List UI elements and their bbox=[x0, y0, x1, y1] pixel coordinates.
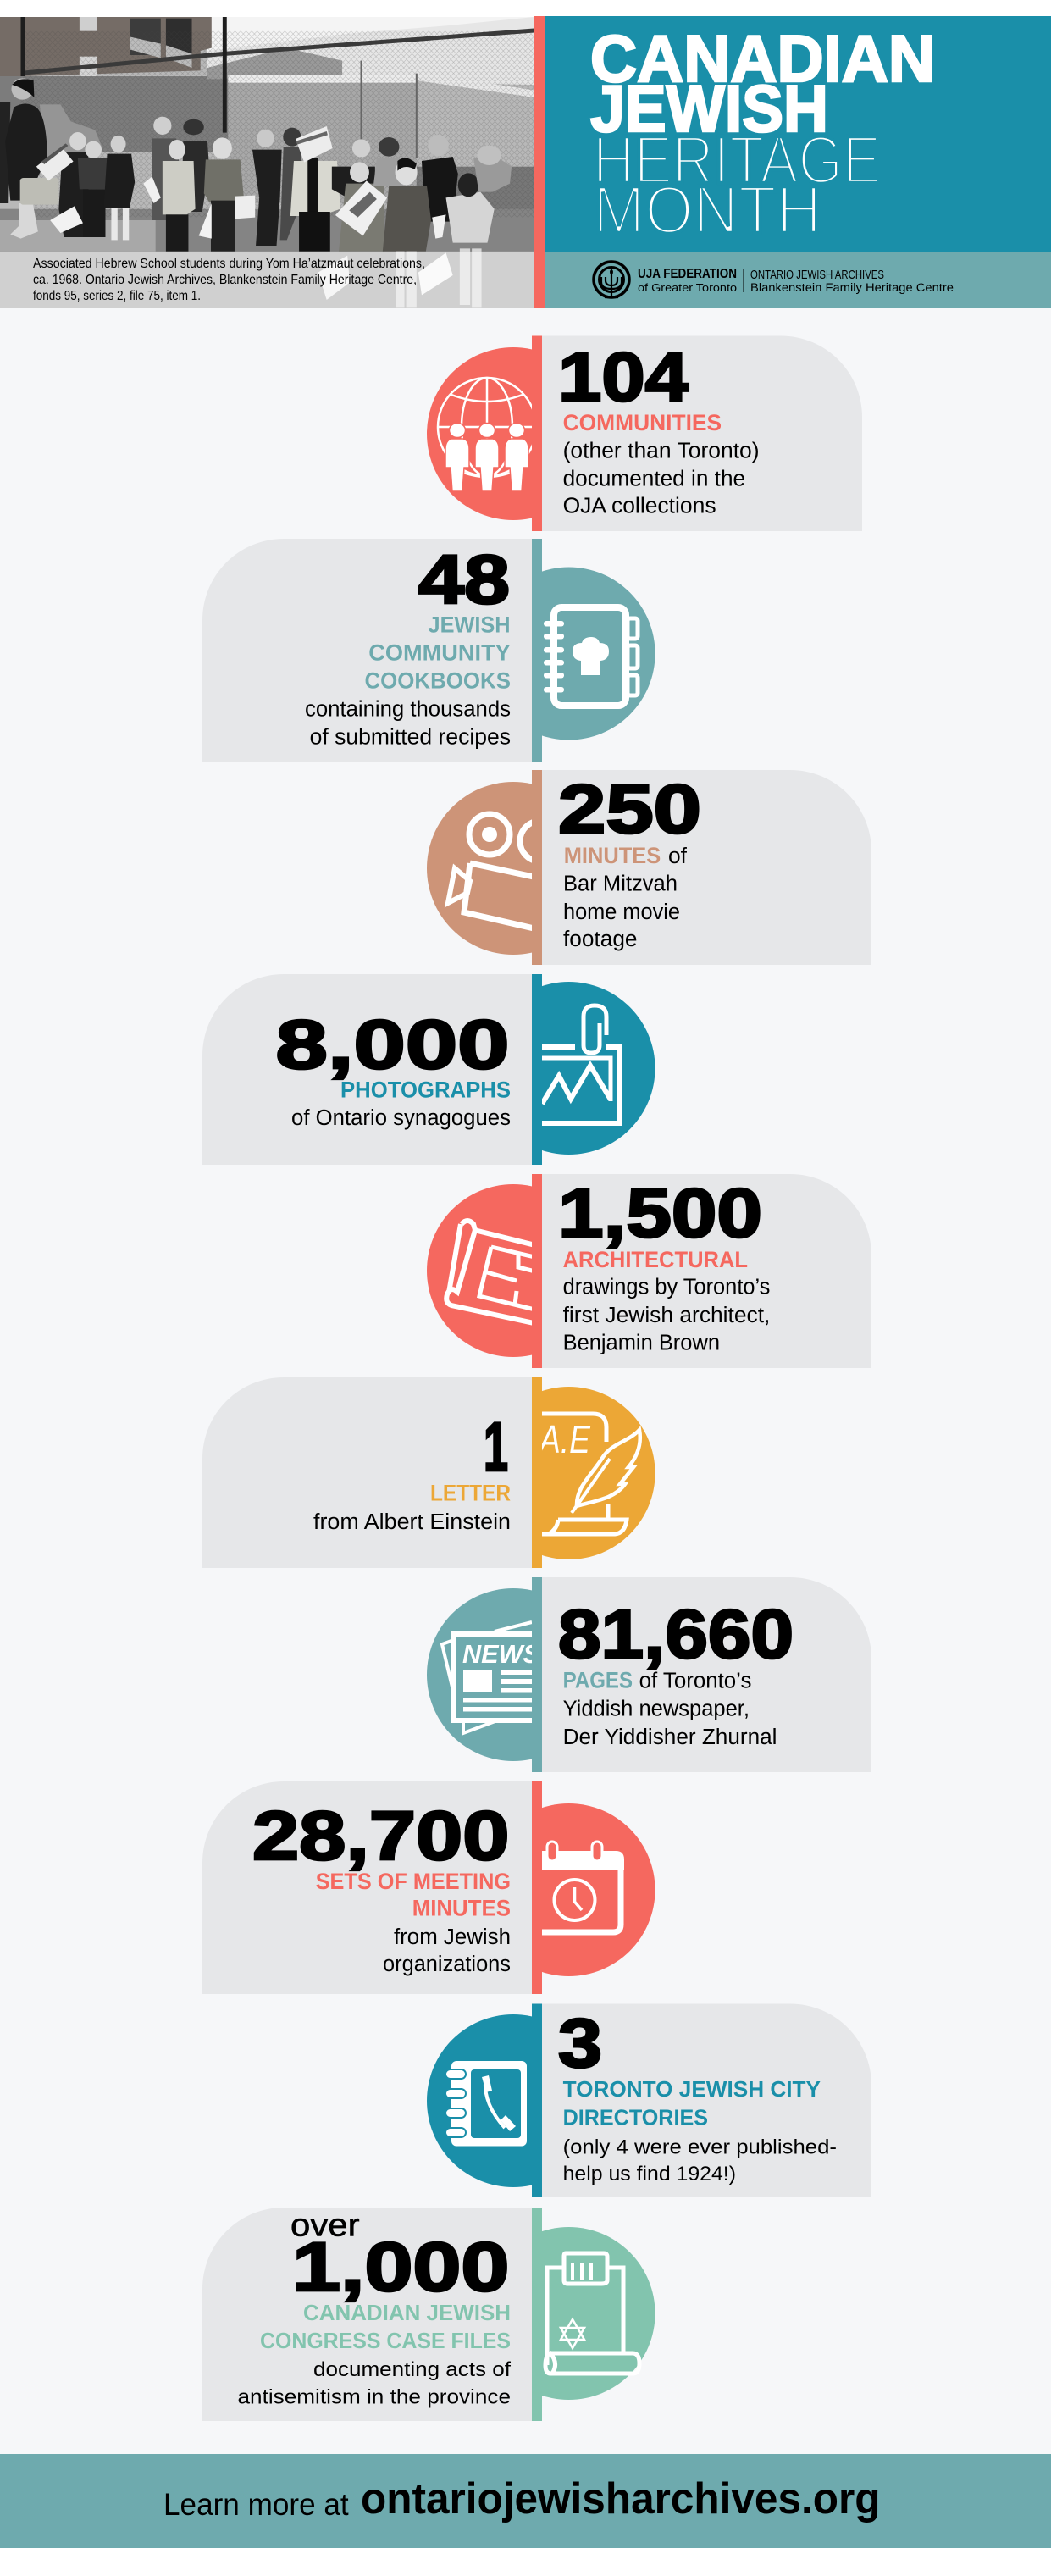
label bbox=[563, 1668, 777, 1749]
logo wordmarks: UJA FEDERATION bbox=[638, 267, 737, 281]
logo wordmarks: ONTARIO JEWISH ARCHIVES bbox=[750, 269, 884, 282]
label: PHOTOGRAPHS bbox=[340, 1077, 511, 1103]
label: help us find 1924!) bbox=[563, 2163, 736, 2185]
label: (other than Toronto) bbox=[563, 439, 760, 463]
stat: over 1,000 case files bbox=[202, 2208, 655, 2421]
icon: letter and quill: A.E bbox=[538, 1417, 591, 1461]
children bbox=[58, 152, 90, 237]
label: Yiddish newspaper, bbox=[563, 1698, 750, 1721]
icon: cookbook bbox=[483, 568, 655, 740]
stat: 8,000 photographs bbox=[202, 974, 655, 1165]
title text: MONTH bbox=[593, 172, 821, 247]
stat: 48 cookbooks bbox=[202, 539, 655, 762]
label: of bbox=[668, 845, 688, 868]
icon: newspaper: NEWS bbox=[462, 1639, 540, 1669]
label: of Toronto’s bbox=[639, 1670, 751, 1693]
logo wordmarks bbox=[638, 267, 954, 294]
label: from Jewish bbox=[394, 1925, 511, 1949]
footer text: Learn more at bbox=[163, 2487, 349, 2522]
label: footage bbox=[563, 928, 637, 951]
label bbox=[313, 1481, 511, 1534]
number: 1,500 bbox=[558, 1175, 762, 1252]
label: home movie bbox=[563, 900, 680, 924]
icon: blueprint scroll bbox=[427, 1184, 600, 1357]
label bbox=[305, 612, 511, 750]
label bbox=[563, 2076, 837, 2185]
label: from Albert Einstein bbox=[313, 1510, 511, 1534]
footer text: ontariojewisharchives.org bbox=[361, 2474, 881, 2523]
label: documenting acts of bbox=[313, 2358, 511, 2381]
logo wordmarks: of Greater Toronto bbox=[638, 281, 737, 294]
label: CONGRESS CASE FILES bbox=[260, 2328, 511, 2353]
number: 3 bbox=[558, 2005, 602, 2082]
label: Bar Mitzvah bbox=[563, 873, 678, 896]
label: LETTER bbox=[430, 1481, 511, 1506]
label: COOKBOOKS bbox=[364, 668, 511, 693]
title text: JEWISH bbox=[590, 71, 828, 146]
label: JEWISH bbox=[429, 612, 510, 638]
stat: 1,500 architectural bbox=[427, 1174, 871, 1368]
stat: 3 directories bbox=[427, 2004, 871, 2197]
stat: 28,700 meeting minutes bbox=[202, 1781, 655, 1994]
flags bbox=[36, 147, 74, 180]
label: containing thousands bbox=[305, 698, 511, 722]
label bbox=[563, 410, 760, 518]
photo caption: ca. 1968. Ontario Jewish Archives, Blankenstein Family Heritage Centre, bbox=[33, 273, 417, 287]
label bbox=[563, 1247, 770, 1355]
label: COMMUNITY bbox=[368, 640, 511, 666]
stat: 250 minutes bbox=[427, 770, 871, 965]
number: 28,700 bbox=[252, 1798, 509, 1875]
qualifier: over bbox=[290, 2208, 360, 2243]
label: organizations bbox=[383, 1953, 511, 1976]
label: OJA collections bbox=[563, 495, 716, 518]
label bbox=[563, 843, 688, 951]
label: DIRECTORIES bbox=[563, 2104, 708, 2130]
title text: CANADIAN bbox=[590, 21, 935, 96]
label bbox=[237, 2300, 511, 2409]
label: drawings by Toronto’s bbox=[563, 1276, 770, 1299]
photo caption bbox=[33, 257, 425, 303]
photo caption: fonds 95, series 2, file 75, item 1. bbox=[33, 289, 201, 303]
icon: letter and quill bbox=[483, 1387, 655, 1559]
number: 48 bbox=[418, 541, 510, 618]
title text bbox=[590, 21, 935, 247]
label: Der Yiddisher Zhurnal bbox=[563, 1726, 777, 1749]
icon: scroll with star of david bbox=[483, 2227, 655, 2400]
label: ARCHITECTURAL bbox=[563, 1247, 748, 1272]
label: MINUTES bbox=[412, 1896, 511, 1921]
label: documented in the bbox=[563, 468, 745, 491]
label: PAGES bbox=[563, 1668, 633, 1693]
label: of submitted recipes bbox=[310, 726, 511, 750]
stat: 104 communities bbox=[427, 335, 862, 531]
icon: newspaper bbox=[427, 1588, 600, 1761]
icon: calendar and clock bbox=[483, 1803, 655, 1976]
label: Benjamin Brown bbox=[563, 1332, 720, 1355]
label: (only 4 were ever published- bbox=[563, 2136, 837, 2158]
header photo: students with flags bbox=[0, 17, 534, 308]
photo caption: Associated Hebrew School students during Yom Ha’atzmaut celebrations, bbox=[33, 257, 425, 271]
label bbox=[291, 1077, 511, 1130]
number: 81,660 bbox=[558, 1596, 794, 1673]
label: MINUTES bbox=[564, 843, 661, 868]
label: CANADIAN JEWISH bbox=[303, 2300, 511, 2325]
number: 250 bbox=[558, 771, 701, 848]
caption band bbox=[0, 252, 534, 308]
icon: phone directory bbox=[427, 2014, 600, 2187]
number: 1 bbox=[484, 1409, 508, 1486]
icon: movie camera bbox=[427, 782, 600, 955]
number: 8,000 bbox=[276, 1006, 510, 1083]
label: antisemitism in the province bbox=[237, 2385, 511, 2409]
icon: UJA menorah logo bbox=[594, 262, 629, 298]
stat: 81,660 pages bbox=[427, 1577, 871, 1772]
label: SETS OF MEETING bbox=[316, 1869, 511, 1894]
label: of Ontario synagogues bbox=[291, 1106, 511, 1130]
label: TORONTO JEWISH CITY bbox=[563, 2076, 821, 2102]
number: 104 bbox=[558, 339, 689, 416]
title panel bbox=[545, 16, 1051, 252]
label: first Jewish architect, bbox=[563, 1304, 770, 1327]
footer text bbox=[163, 2474, 881, 2523]
footer band bbox=[0, 2454, 1051, 2548]
number: 1,000 bbox=[292, 2229, 509, 2306]
icon: paperclipped photo bbox=[483, 982, 655, 1155]
logo band bbox=[545, 252, 1051, 308]
stat: 1 letter bbox=[202, 1377, 655, 1568]
adults bbox=[40, 104, 102, 158]
icon: globe with people bbox=[427, 347, 600, 520]
logo wordmarks: Blankenstein Family Heritage Centre bbox=[750, 281, 954, 294]
label: COMMUNITIES bbox=[563, 410, 722, 435]
panel background bbox=[542, 335, 862, 531]
title text: HERITAGE bbox=[593, 122, 881, 197]
label bbox=[316, 1869, 511, 1976]
header accent bar bbox=[534, 16, 545, 308]
